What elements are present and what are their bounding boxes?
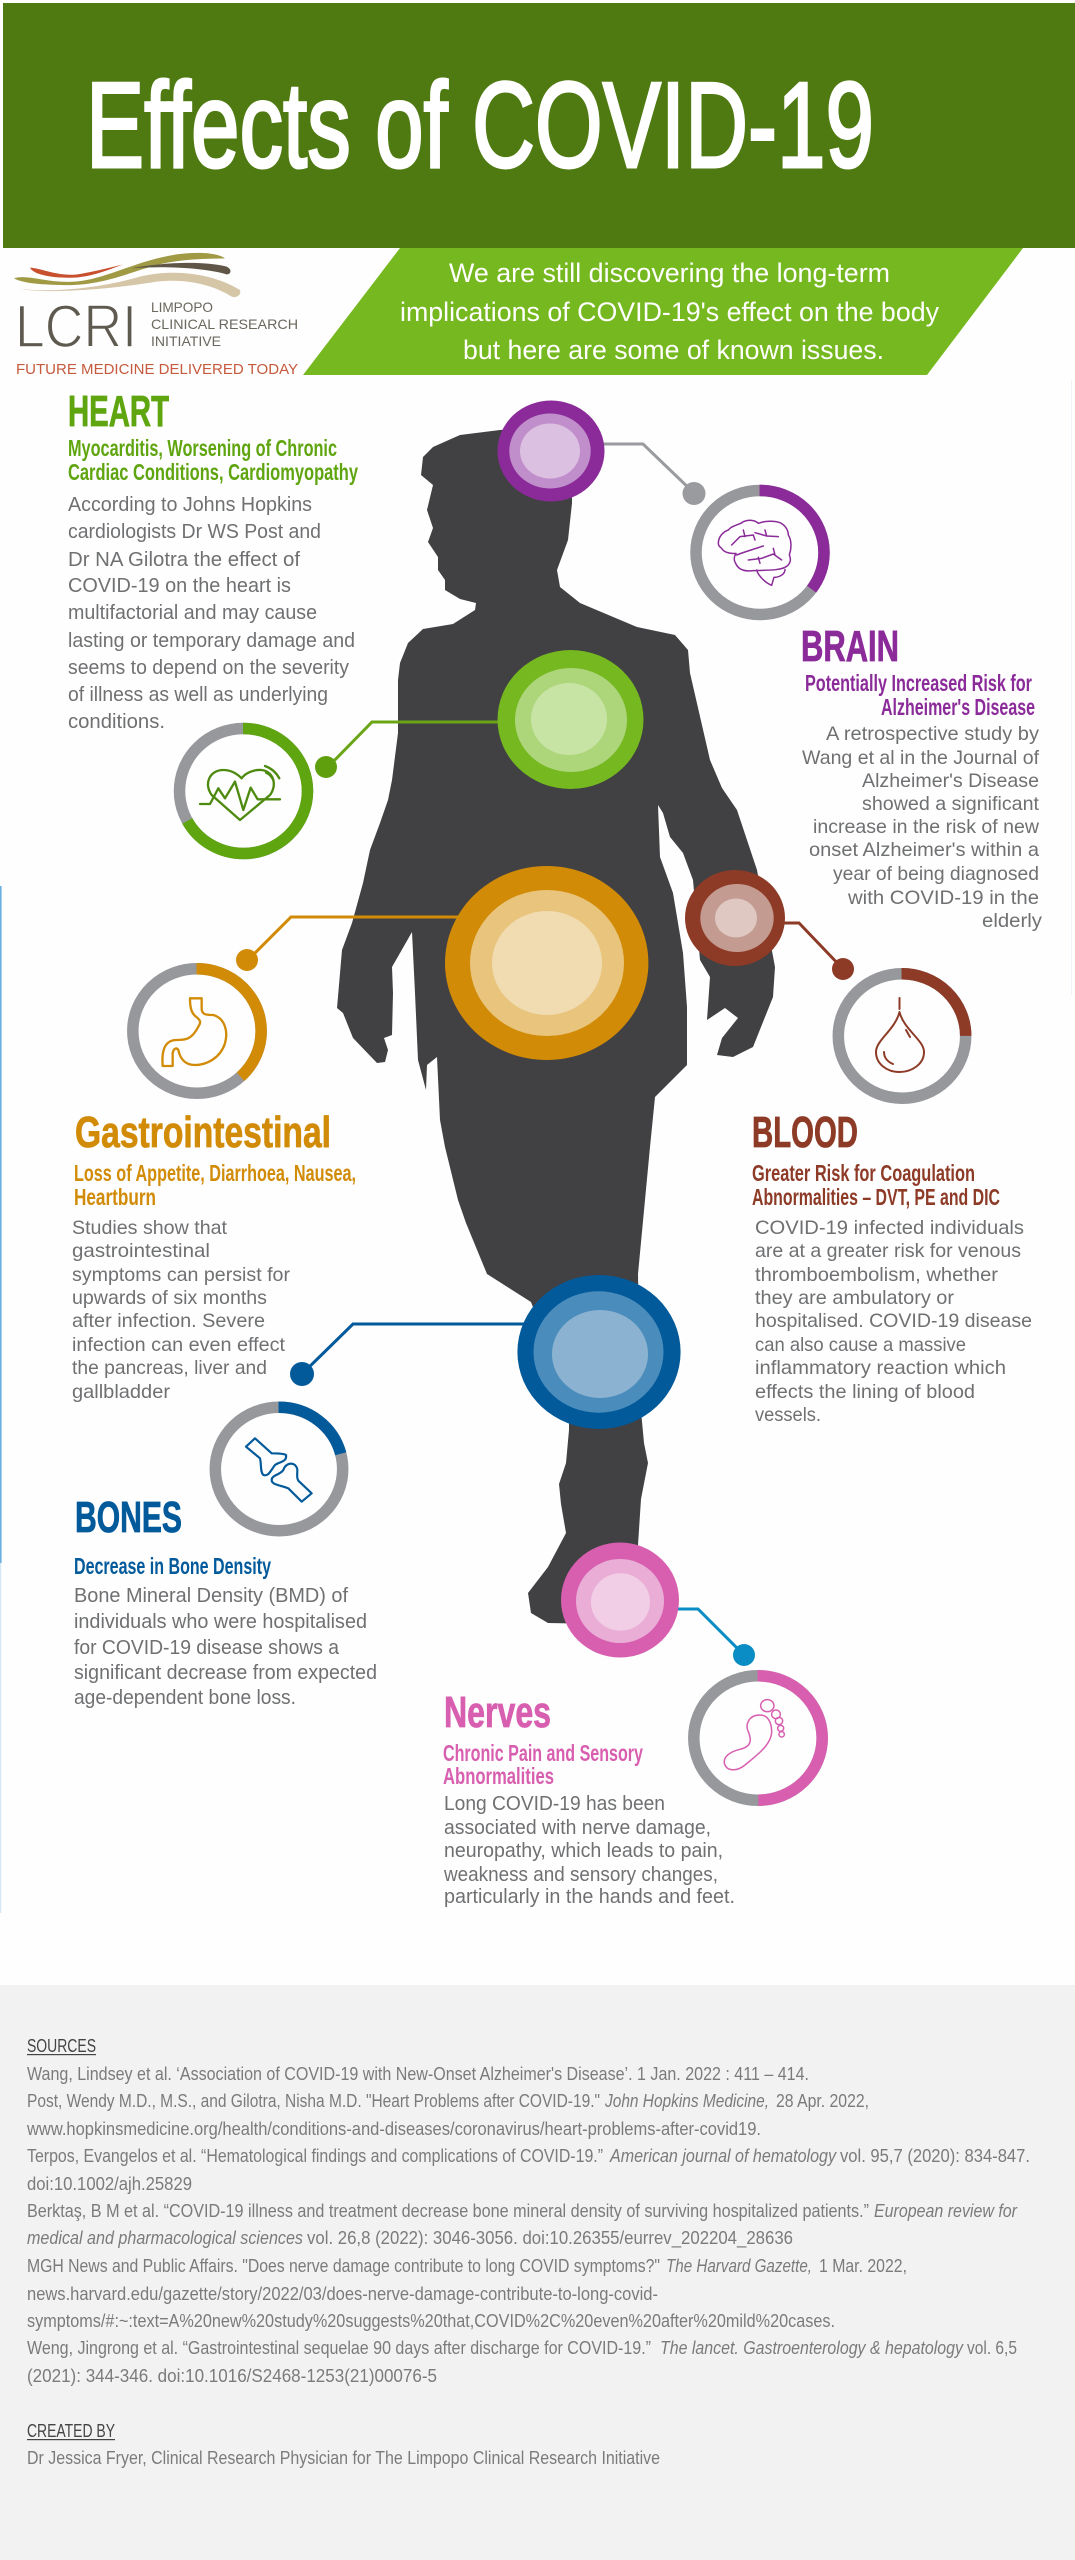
subheading: nerves: Chronic Pain and Sensory xyxy=(443,1740,643,1766)
intro banner: implications of COVID-19's effect on the body xyxy=(400,297,939,327)
reference list: The Harvard Gazette, xyxy=(666,2256,812,2276)
reference list: Post, Wendy M.D., M.S., and Gilotra, Nisha M.D. "Heart Problems after COVID-19." xyxy=(27,2091,600,2111)
body text: brain: elderly xyxy=(982,910,1042,932)
body text: blood: thromboembolism, whether xyxy=(755,1264,999,1286)
body text: nerves: Long COVID-19 has been xyxy=(444,1793,665,1815)
body text: brain: Alzheimer's Disease xyxy=(862,770,1039,792)
body text: blood: inflammatory reaction which xyxy=(755,1357,1006,1379)
body text: heart: lasting or temporary damage and xyxy=(68,630,355,652)
body text: bones: age-dependent bone loss. xyxy=(74,1687,296,1709)
body text: brain: increase in the risk of new xyxy=(813,816,1040,838)
subheading: heart xyxy=(68,435,358,485)
panel: brain xyxy=(801,622,1042,932)
header banner with title xyxy=(3,3,1075,248)
heading: gastrointestinal: Gastrointestinal xyxy=(75,1108,331,1157)
body text: brain: A retrospective study by xyxy=(826,723,1039,745)
ring icon: heart xyxy=(180,728,308,854)
reference list: Terpos, Evangelos et al. “Hematological findings and complications of COVID-19.” xyxy=(27,2146,603,2166)
reference list: Berktaş, B M et al. “COVID-19 illness and treatment decrease bone mineral density of surviving hospitalized patients.” xyxy=(27,2201,869,2221)
body text: nerves: weakness and sensory changes, xyxy=(443,1864,718,1886)
reference list: Wang, Lindsey et al. ‘Association of COVID-19 with New-Onset Alzheimer's Disease’. 1 Jan. 2022 : 411 – 414. xyxy=(27,2064,809,2084)
logo: LCRI xyxy=(14,253,298,378)
reference list: Weng, Jingrong et al. “Gastrointestinal sequelae 90 days after discharge for COVID-19.” xyxy=(27,2338,651,2358)
reference list: (2021): 344-346. doi:10.1016/S2468-1253(21)00076-5 xyxy=(27,2366,437,2386)
body text: heart: of illness as well as underlying xyxy=(68,684,328,706)
body marker: nerves xyxy=(561,1542,679,1658)
ring icon: stomach xyxy=(133,969,261,1093)
intro banner xyxy=(303,248,1023,375)
body text: blood: hospitalised. COVID-19 disease xyxy=(755,1310,1032,1332)
subheading: heart: Cardiac Conditions, Cardiomyopathy xyxy=(68,459,358,485)
reference list: www.hopkinsmedicine.org/health/conditions-and-diseases/coronavirus/heart-problems-after-covid19. xyxy=(26,2119,761,2139)
subheading: nerves xyxy=(443,1740,643,1789)
body text: brain xyxy=(802,723,1042,932)
heading: brain: BRAIN xyxy=(801,622,899,671)
body text: blood: COVID-19 infected individuals xyxy=(755,1217,1024,1239)
body text: bones: significant decrease from expected xyxy=(74,1662,377,1684)
connector: heart xyxy=(315,722,505,778)
panel: sources xyxy=(0,1985,1075,2560)
ring icon: blood drop xyxy=(838,974,966,1098)
intro banner: but here are some of known issues. xyxy=(463,335,884,365)
subheading: gastrointestinal: Loss of Appetite, Diarrhoea, Nausea, xyxy=(74,1160,356,1186)
reference list: John Hopkins Medicine, xyxy=(604,2091,769,2111)
reference list: 1 Mar. 2022, xyxy=(819,2256,907,2276)
body marker: heart xyxy=(498,650,644,789)
body text: nerves: neuropathy, which leads to pain, xyxy=(444,1840,723,1862)
reference list: vol. 26,8 (2022): 3046-3056. doi:10.26355/eurrev_202204_28636 xyxy=(307,2228,793,2249)
body text: gastrointestinal: the pancreas, liver and xyxy=(72,1357,267,1379)
reference list: European review for xyxy=(874,2201,1018,2221)
body text: heart: Dr NA Gilotra the effect of xyxy=(68,549,300,571)
body text: blood: are at a greater risk for venous xyxy=(755,1240,1021,1262)
reference list: The lancet. Gastroenterology & hepatology xyxy=(660,2338,964,2358)
intro banner: We are still discovering the long-term xyxy=(449,258,890,288)
reference list: doi:10.1002/ajh.25829 xyxy=(27,2174,192,2194)
body text: heart xyxy=(68,494,355,733)
panel: blood xyxy=(752,1108,1032,1426)
body marker: bones xyxy=(517,1275,681,1429)
ring icon: foot xyxy=(694,1676,822,1800)
body text: heart: According to Johns Hopkins xyxy=(68,494,312,516)
body text: gastrointestinal: Studies show that xyxy=(72,1217,228,1239)
reference list: vol. 95,7 (2020): 834-847. xyxy=(840,2146,1030,2166)
body text: heart: COVID-19 on the heart is xyxy=(68,575,291,597)
body text: heart: multifactorial and may cause xyxy=(68,602,317,624)
body marker: blood xyxy=(685,870,785,966)
heading: nerves: Nerves xyxy=(444,1688,551,1737)
ring icon: bones xyxy=(215,1407,343,1531)
body text: brain: Wang et al in the Journal of xyxy=(802,747,1040,769)
reference list: news.harvard.edu/gazette/story/2022/03/does-nerve-damage-contribute-to-long-covid- xyxy=(27,2284,658,2304)
reference list: 28 Apr. 2022, xyxy=(776,2091,869,2111)
subheading: brain xyxy=(805,670,1035,720)
body marker: gastrointestinal xyxy=(445,866,648,1060)
body text: bones: for COVID-19 disease shows a xyxy=(74,1637,340,1659)
body text: bones: individuals who were hospitalised xyxy=(74,1611,367,1633)
body text: blood: vessels. xyxy=(755,1404,821,1426)
logo: LCRI: INITIATIVE xyxy=(151,333,221,349)
logo: LCRI: CLINICAL RESEARCH xyxy=(151,316,298,332)
reference list: vol. 6,5 xyxy=(967,2338,1017,2358)
reference list: American journal of hematology xyxy=(609,2146,837,2166)
body text: nerves: associated with nerve damage, xyxy=(444,1817,711,1839)
body text: nerves xyxy=(443,1793,735,1908)
subheading: gastrointestinal: Heartburn xyxy=(74,1184,156,1210)
sources heading: SOURCES xyxy=(27,2036,96,2056)
heading: bones: BONES xyxy=(75,1493,182,1542)
body text: bones: Bone Mineral Density (BMD) of xyxy=(74,1585,348,1607)
logo: LCRI: LCRI xyxy=(15,293,137,360)
logo: LCRI: FUTURE MEDICINE DELIVERED TODAY xyxy=(16,362,298,378)
body text: blood: they are ambulatory or xyxy=(755,1287,955,1309)
body text: gastrointestinal: gallbladder xyxy=(72,1381,171,1403)
subheading: heart: Myocarditis, Worsening of Chronic xyxy=(68,435,337,461)
body text: blood xyxy=(755,1217,1032,1426)
body text: bones xyxy=(74,1585,377,1709)
heading: blood: BLOOD xyxy=(752,1108,858,1157)
panel: nerves xyxy=(443,1688,735,1908)
heading: heart: HEART xyxy=(68,387,169,436)
subheading: blood: Greater Risk for Coagulation xyxy=(752,1160,975,1186)
body text: brain: onset Alzheimer's within a xyxy=(809,839,1039,861)
body text: gastrointestinal: after infection. Severe xyxy=(72,1310,265,1332)
subheading: nerves: Abnormalities xyxy=(443,1763,554,1789)
body text: gastrointestinal: upwards of six months xyxy=(72,1287,267,1309)
body text: gastrointestinal: infection can even effect xyxy=(72,1334,286,1356)
body text: blood: can also cause a massive xyxy=(755,1334,966,1356)
ring icon: brain xyxy=(696,490,824,614)
body text: gastrointestinal: gastrointestinal xyxy=(72,1240,210,1262)
panel: bones xyxy=(74,1493,377,1709)
body marker: brain xyxy=(498,400,604,502)
reference list: symptoms/#:~:text=A%20new%20study%20suggests%20that,COVID%2C%20even%20after%20mild%20cases. xyxy=(27,2311,835,2331)
connector: blood xyxy=(780,923,854,980)
body text: blood: effects the lining of blood xyxy=(755,1381,975,1403)
reference list: MGH News and Public Affairs. "Does nerve damage contribute to long COVID symptoms?" xyxy=(27,2256,660,2276)
reference list xyxy=(26,2064,1030,2386)
reference list: medical and pharmacological sciences xyxy=(27,2228,303,2248)
human silhouette xyxy=(337,425,775,1624)
subheading: gastrointestinal xyxy=(74,1160,356,1210)
body text: brain: year of being diagnosed xyxy=(833,863,1039,885)
body text: gastrointestinal xyxy=(72,1217,291,1403)
body text: brain: showed a significant xyxy=(862,793,1040,815)
body text: brain: with COVID-19 in the xyxy=(847,887,1039,909)
connector: brain xyxy=(600,444,706,505)
logo: LCRI: LIMPOPO xyxy=(151,299,213,315)
connector: bones xyxy=(290,1324,530,1386)
panel: gastrointestinal xyxy=(72,1108,356,1403)
connector: gastrointestinal xyxy=(236,917,460,971)
author credit: Dr Jessica Fryer, Clinical Research Physician for The Limpopo Clinical Research Initiative xyxy=(27,2448,660,2468)
panel: heart xyxy=(68,387,358,733)
body text: heart: conditions. xyxy=(68,711,165,733)
body text: heart: cardiologists Dr WS Post and xyxy=(68,521,321,543)
subheading: bones: Decrease in Bone Density xyxy=(74,1553,271,1579)
body text: gastrointestinal: symptoms can persist for xyxy=(72,1264,291,1286)
body text: heart: seems to depend on the severity xyxy=(68,657,349,679)
created by heading: CREATED BY xyxy=(27,2421,115,2441)
connector: nerves xyxy=(670,1609,755,1666)
subheading: blood xyxy=(752,1160,1000,1210)
body text: nerves: particularly in the hands and feet. xyxy=(444,1886,735,1908)
